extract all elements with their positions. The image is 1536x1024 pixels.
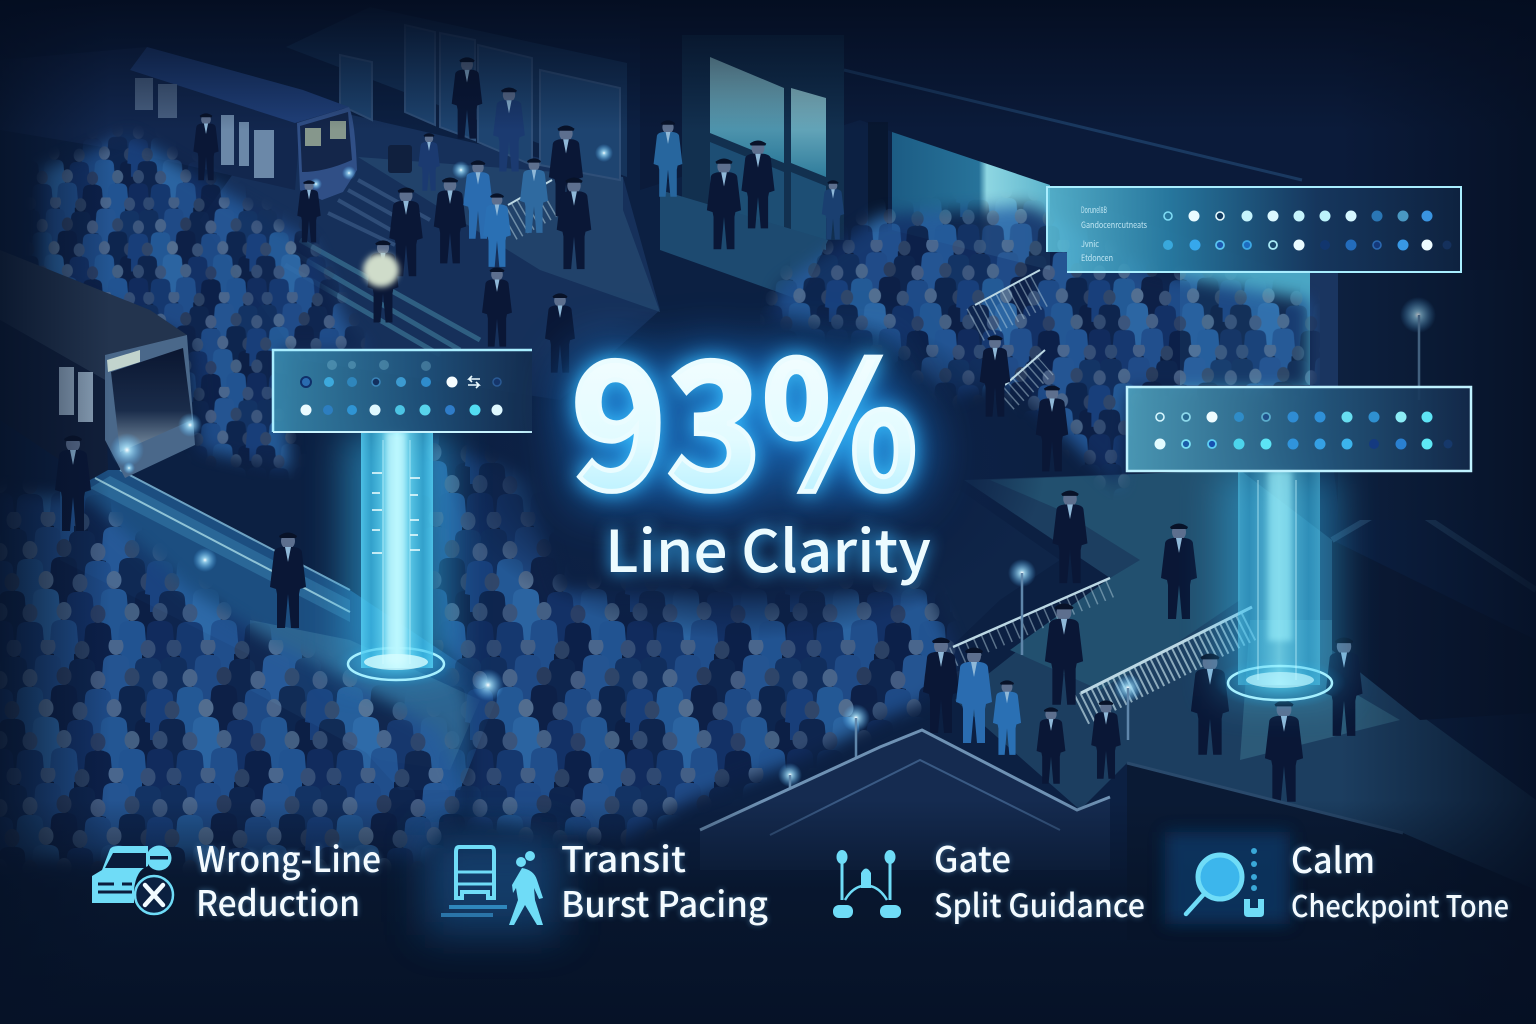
left glowing column — [336, 432, 456, 688]
label — [561, 832, 768, 928]
sub-heading: Line Clarity: Line Clarity — [605, 505, 931, 589]
railings — [508, 180, 1252, 710]
right glowing column — [1214, 471, 1346, 709]
crowd: centre — [433, 436, 960, 844]
icon: magnifier and dots — [1186, 848, 1264, 917]
lamps — [193, 144, 1436, 830]
label: Checkpoint Tone — [1291, 882, 1509, 926]
label: Split Guidance — [934, 881, 1145, 927]
small panel text: Gandocenrcutneats — [1081, 219, 1147, 231]
upper right data panel — [1047, 187, 1461, 272]
small panel text: Etdoncen — [1081, 252, 1113, 264]
stairs — [328, 180, 430, 245]
icon: gate split — [833, 850, 901, 918]
icon: car with stop marks — [92, 846, 173, 914]
suitcase — [388, 145, 412, 173]
crowd: upper right — [760, 180, 1320, 500]
crowd: lower left — [0, 488, 469, 866]
icon: bus and walker — [441, 847, 543, 925]
label: Calm — [1291, 833, 1375, 884]
item: Wrong-Line Reduction — [92, 832, 381, 927]
lower structures and stairs — [700, 730, 1536, 940]
small panel text: Jvnic — [1081, 238, 1100, 250]
label: Reduction — [196, 876, 360, 927]
ground plane — [60, 100, 1536, 900]
panel arrow glyph — [468, 376, 480, 388]
label: Burst Pacing — [561, 877, 768, 928]
item: Gate Split Guidance — [833, 832, 1145, 927]
crossing stripes — [285, 240, 480, 355]
train far — [0, 47, 357, 200]
label — [196, 832, 381, 927]
label: Gate — [934, 832, 1011, 883]
crowd: upper left — [34, 131, 366, 476]
label: Wrong-Line — [196, 832, 381, 883]
item: Transit Burst Pacing — [425, 832, 768, 935]
darkening behind headline — [445, 300, 1045, 640]
doorway light — [892, 132, 1050, 270]
label: Transit — [561, 832, 686, 883]
window glass — [710, 57, 784, 163]
lower right data panel — [1127, 387, 1471, 471]
station facade top left — [286, 7, 627, 180]
train near — [0, 250, 202, 480]
faint dots — [327, 360, 431, 371]
staff figures — [55, 57, 1363, 802]
small panel text: Dorunel8B — [1081, 204, 1107, 216]
headline glow — [515, 320, 975, 560]
label — [1291, 833, 1509, 926]
panel dots: lower right — [1154, 412, 1452, 450]
panel dots: upper right — [1163, 210, 1452, 250]
headline: 93%: 93% — [571, 287, 918, 540]
small panel text — [1081, 204, 1147, 264]
panel dots: left — [300, 376, 502, 416]
item: Calm Checkpoint Tone — [1165, 832, 1509, 926]
highlighted bag — [363, 253, 399, 287]
building top centre and right — [640, 0, 1536, 520]
left data panel — [273, 350, 532, 432]
label — [934, 832, 1145, 927]
